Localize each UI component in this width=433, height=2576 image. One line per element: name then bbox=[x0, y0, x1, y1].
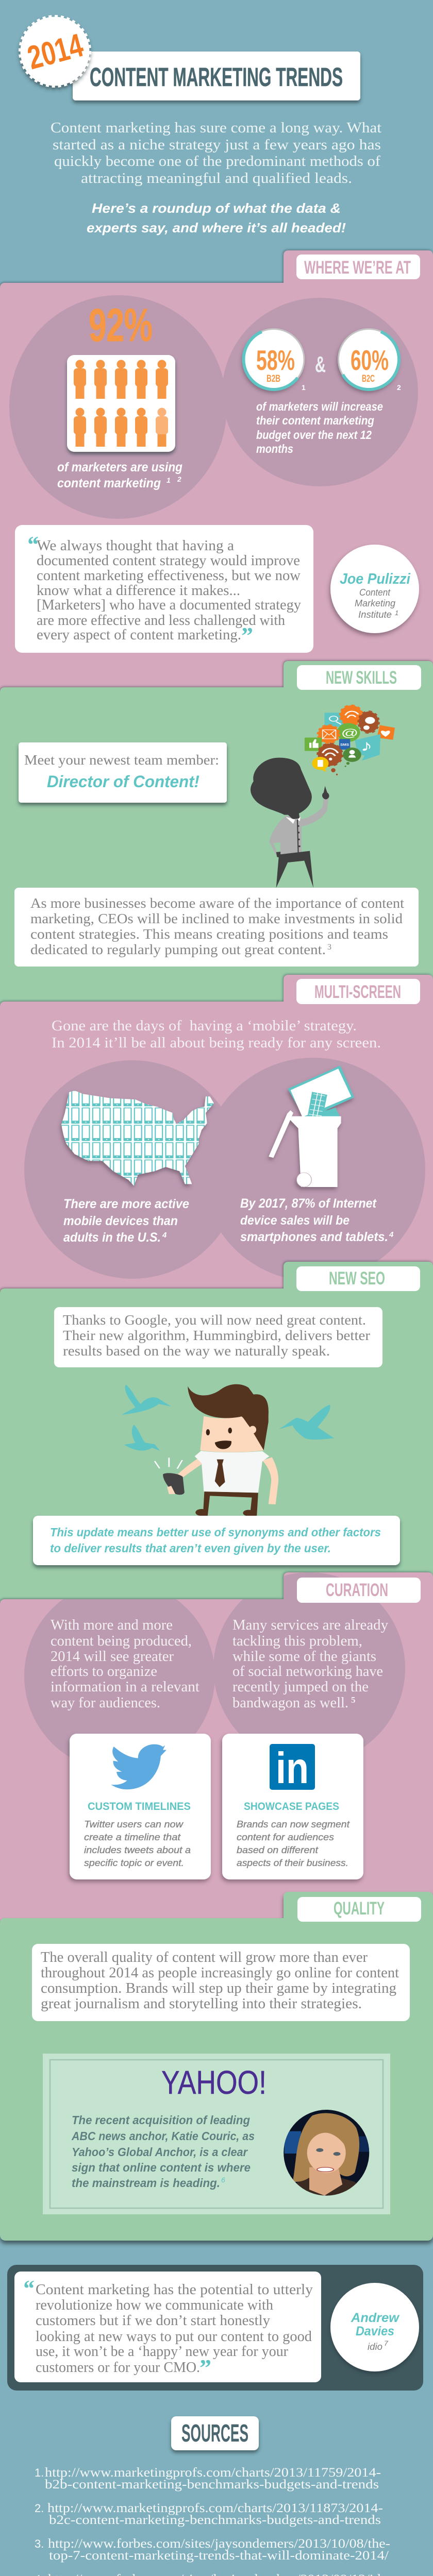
sources list: http://www.marketingprofs.com/charts/2013/11873/2014- bbox=[47, 2501, 383, 2515]
text card: quality: consumption. Brands will step up their game by integrating bbox=[41, 1980, 396, 1996]
card: director of content: Director of Content! bbox=[47, 772, 199, 791]
attribution circle: Joe Pulizzi: Marketing bbox=[355, 598, 395, 608]
quote card: Joe Pulizzi: “ bbox=[26, 531, 38, 557]
pictogram: ten people bbox=[67, 355, 175, 452]
backdrop circle: right bbox=[222, 298, 418, 486]
intro text bbox=[51, 120, 381, 187]
text card: new skills: As more businesses become aware of the importance of content bbox=[30, 895, 405, 911]
text: right column: 5 bbox=[351, 1695, 356, 1705]
stat text: device sales bbox=[240, 1196, 394, 1244]
panel: new seo bbox=[0, 1262, 433, 1602]
panel: closing quote bbox=[7, 2265, 423, 2391]
text card: quality: throughout 2014 as people increasingly go online for content bbox=[41, 1965, 399, 1981]
card: twitter custom timelines: Twitter users can now bbox=[84, 1819, 184, 1829]
illustration: devices in trash can bbox=[269, 1065, 354, 1187]
sources list: http://www.marketingprofs.com/charts/2013/11759/2014- bbox=[45, 2466, 381, 2480]
title block bbox=[20, 16, 360, 100]
intro callout bbox=[87, 200, 346, 235]
backdrop circles bbox=[24, 1572, 405, 1771]
card: linkedin showcase pages: aspects of their business. bbox=[237, 1858, 348, 1868]
quote card: Andrew Davies: use, it won’t be a ‘happy’ new year for your bbox=[36, 2344, 289, 2360]
intro text: started as a niche strategy just a few years ago has bbox=[53, 137, 381, 153]
stat caption: right: budget over the next 12 bbox=[256, 428, 372, 442]
quote card: Joe Pulizzi: content marketing effectiveness, but we now bbox=[37, 568, 301, 584]
tab label: CURATION bbox=[326, 1580, 388, 1600]
tab label bbox=[297, 665, 421, 690]
text card: new skills bbox=[14, 888, 419, 967]
quote card: Joe Pulizzi: documented content strategy would improve bbox=[37, 553, 300, 569]
sources heading: SOURCES bbox=[181, 2420, 248, 2447]
quote card: Joe Pulizzi: every aspect of content marketing. bbox=[37, 627, 241, 643]
attribution circle: Andrew Davies: Andrew bbox=[351, 2311, 400, 2325]
quote card: Joe Pulizzi: are more effective and less challenged with bbox=[37, 613, 285, 629]
tab label: NEW SEO bbox=[329, 1268, 385, 1289]
card: twitter custom timelines: includes tweets about a bbox=[84, 1845, 191, 1855]
quote card: Joe Pulizzi: We always thought that having a bbox=[37, 538, 235, 554]
yahoo text: sign that online content is where bbox=[72, 2161, 251, 2174]
ampersand: & bbox=[315, 352, 326, 377]
tab label: QUALITY bbox=[334, 1899, 385, 1919]
yahoo text: The recent acquisition of leading bbox=[72, 2113, 250, 2127]
tab label bbox=[297, 1578, 421, 1603]
text: left column bbox=[51, 1617, 199, 1711]
ring: 60% B2C bbox=[329, 319, 409, 399]
yahoo feature box bbox=[43, 2054, 390, 2214]
text: right column: recently jumped on the bbox=[232, 1679, 369, 1695]
quote card: Andrew Davies: customers but if we don’t start honestly bbox=[36, 2313, 270, 2329]
callout card: update bbox=[33, 1516, 400, 1565]
quote card: Joe Pulizzi: ” bbox=[241, 622, 253, 649]
attribution circle: Joe Pulizzi: Institute bbox=[358, 609, 392, 620]
stat: 92%: 92% bbox=[89, 300, 153, 351]
intro text: attracting meaningful and qualified leads. bbox=[81, 171, 352, 187]
text card: hummingbird: results based on the way we naturally speak. bbox=[63, 1343, 330, 1359]
sources heading bbox=[171, 2416, 259, 2450]
yahoo text: ABC news anchor, Katie Couric, as bbox=[71, 2129, 255, 2143]
stat text: device sales: smartphones and tablets. bbox=[240, 1230, 388, 1244]
icon cluster: social media: ♪ bbox=[360, 737, 373, 754]
attribution circle: Joe Pulizzi: Content bbox=[359, 587, 391, 598]
yahoo text: 6 bbox=[221, 2176, 225, 2184]
yahoo text bbox=[71, 2113, 255, 2190]
card: linkedin showcase pages: Brands can now segment bbox=[237, 1819, 350, 1829]
text card: quality: great journalism and storytelling into their strategies. bbox=[41, 1996, 362, 2012]
card: twitter custom timelines: specific topic or event. bbox=[84, 1858, 184, 1868]
stat text: device sales: By 2017, 87% of Internet bbox=[240, 1196, 377, 1211]
stat text: mobile devices bbox=[63, 1197, 189, 1245]
card: director of content bbox=[19, 742, 227, 803]
quote card: Joe Pulizzi bbox=[15, 525, 313, 653]
attribution circle: Joe Pulizzi: Joe Pulizzi bbox=[340, 571, 411, 587]
text: left column: With more and more bbox=[51, 1617, 173, 1633]
text card: hummingbird bbox=[54, 1307, 382, 1367]
yahoo text: the mainstream is heading. bbox=[72, 2176, 220, 2190]
tab label bbox=[296, 979, 420, 1004]
stat caption: right: their content marketing bbox=[256, 414, 374, 427]
ring: 60% B2C: B2C bbox=[362, 374, 375, 384]
text card: hummingbird: Thanks to Google, you will now need great content. bbox=[63, 1312, 366, 1328]
text: right column: while some of the giants bbox=[232, 1649, 376, 1665]
text: left column: efforts to organize bbox=[51, 1664, 157, 1680]
text card: hummingbird: Their new algorithm, Hummingbird, delivers better bbox=[63, 1328, 370, 1343]
panel: new skills bbox=[0, 661, 433, 1005]
intro text: In 2014 it’ll be all about being ready for any screen. bbox=[52, 1035, 381, 1051]
illustration: man with phone bbox=[155, 1384, 278, 1516]
card: twitter custom timelines bbox=[70, 1734, 211, 1879]
card: linkedin showcase pages: content for audiences bbox=[237, 1832, 334, 1842]
intro callout: Here’s a roundup of what the data & bbox=[92, 200, 341, 216]
text: right column: of social networking have bbox=[232, 1664, 383, 1680]
sources list: top-7-content-marketing-trends-that-will-dominate-2014/ bbox=[49, 2549, 389, 2563]
stat text: mobile devices: There are more active bbox=[63, 1197, 189, 1211]
icon cluster: social media: @ bbox=[341, 727, 358, 739]
sources list: http://www.forbes.com/sites/jaysondemers/2013/10/08/the- bbox=[48, 2537, 390, 2551]
title box bbox=[73, 52, 360, 100]
quote card: Andrew Davies: Content marketing has the potential to utterly bbox=[36, 2282, 313, 2298]
map: USA filled with phones bbox=[61, 1091, 214, 1186]
illustration: man pointing bbox=[251, 758, 329, 888]
portrait: Katie Couric bbox=[284, 2110, 370, 2196]
attribution circle: Andrew Davies: idio bbox=[368, 2342, 382, 2352]
sources list bbox=[34, 2466, 392, 2576]
attribution circle: Andrew Davies: 7 bbox=[384, 2339, 389, 2347]
stat text: mobile devices: 4 bbox=[162, 1231, 167, 1240]
2014 badge bbox=[20, 16, 90, 87]
callout card: update: to deliver results that aren’t even given by the user. bbox=[50, 1541, 331, 1555]
stat caption: left: content marketing bbox=[57, 476, 161, 490]
icon cluster: social media: SMS bbox=[340, 743, 349, 747]
ring: 58% B2B: 58% bbox=[256, 344, 295, 376]
text: left column: content being produced, bbox=[51, 1633, 192, 1649]
yahoo logo: YAHOO! bbox=[161, 2064, 267, 2101]
yahoo text: Yahoo’s Global Anchor, is a clear bbox=[72, 2145, 248, 2159]
icon: twitter bird bbox=[111, 1744, 166, 1789]
illustration: hummingbirds bbox=[122, 1384, 334, 1451]
card: twitter custom timelines: create a timeline that bbox=[84, 1832, 181, 1842]
tab label bbox=[296, 1266, 420, 1291]
sources list: 3. bbox=[35, 2537, 44, 2550]
sources list: b2c-content-marketing-benchmarks-budgets-and-trends bbox=[49, 2513, 381, 2527]
stat text: device sales: 4 bbox=[389, 1230, 394, 1239]
sources list: 2. bbox=[35, 2502, 44, 2515]
quote card: Joe Pulizzi: know what a difference it makes... bbox=[37, 583, 240, 599]
quote card: Andrew Davies bbox=[14, 2272, 321, 2382]
tab label bbox=[297, 1897, 421, 1922]
stat caption: left: 2 bbox=[177, 475, 181, 483]
stat text: device sales: device sales will be bbox=[240, 1213, 349, 1228]
quote card: Andrew Davies: customers or for your CMO. bbox=[36, 2360, 200, 2376]
stat caption: right: of marketers will increase bbox=[256, 400, 383, 413]
ring: 58% B2B: 1 bbox=[302, 383, 306, 392]
icon: linkedin: in bbox=[276, 1744, 309, 1793]
attribution circle: Joe Pulizzi: 1 bbox=[395, 609, 398, 617]
callout card: update: This update means better use of synonyms and other factors bbox=[50, 1526, 381, 1539]
card: linkedin showcase pages: SHOWCASE PAGES bbox=[244, 1801, 339, 1812]
panel: where we're at bbox=[0, 250, 433, 690]
text: left column: information in a relevant bbox=[51, 1679, 199, 1695]
text: left column: way for audiences. bbox=[51, 1695, 160, 1711]
panel: curation bbox=[0, 1572, 433, 1922]
text: right column bbox=[232, 1617, 388, 1711]
ring: 60% B2C: 2 bbox=[397, 383, 401, 392]
sources list: b2b-content-marketing-benchmarks-budgets-and-trends bbox=[45, 2478, 379, 2492]
ring: 60% B2C: 60% bbox=[351, 344, 389, 376]
text: right column: tackling this problem, bbox=[232, 1633, 362, 1649]
sources list: 1. bbox=[35, 2466, 44, 2479]
card: twitter custom timelines: CUSTOM TIMELINES bbox=[88, 1801, 191, 1812]
quote card: Andrew Davies: looking at new ways to put our content to good bbox=[36, 2329, 312, 2345]
backdrop circle: right bbox=[202, 1058, 425, 1281]
text: left column: 2014 will see greater bbox=[51, 1649, 174, 1665]
text card: quality: The overall quality of content will grow more than ever bbox=[41, 1950, 368, 1965]
icon cluster: social media bbox=[305, 705, 395, 775]
text card: quality bbox=[32, 1944, 410, 2021]
ring: 58% B2B: B2B bbox=[267, 374, 280, 384]
panel: quality bbox=[0, 1892, 433, 2241]
attribution circle: Andrew Davies: Davies bbox=[356, 2324, 394, 2338]
intro text: Gone are the days of having a ‘mobile’ strategy. bbox=[52, 1018, 357, 1034]
stat caption: right: months bbox=[256, 442, 293, 455]
text card: new skills: marketing, CEOs will be inclined to make investments in solid bbox=[30, 911, 403, 926]
intro text: Content marketing has sure come a long way. What bbox=[51, 120, 381, 136]
quote card: Andrew Davies: revolutionize how we communicate with bbox=[36, 2297, 273, 2313]
intro text: quickly become one of the predominant methods of bbox=[54, 154, 381, 170]
quote card: Joe Pulizzi: [Marketers] who have a documented strategy bbox=[37, 597, 301, 613]
ring: 58% B2B bbox=[231, 317, 316, 402]
attribution circle: Andrew Davies bbox=[330, 2283, 419, 2371]
text card: new skills: 3 bbox=[327, 943, 331, 952]
card: linkedin showcase pages: based on different bbox=[237, 1845, 319, 1855]
text: right column: bandwagon as well. bbox=[232, 1695, 348, 1711]
stat caption: left: of marketers are using bbox=[57, 460, 182, 474]
stat caption: left bbox=[57, 460, 182, 490]
attribution circle: Joe Pulizzi bbox=[330, 545, 419, 633]
text: right column: Many services are already bbox=[232, 1617, 388, 1633]
stat caption: left: 1 bbox=[166, 476, 171, 484]
backdrop circle: left bbox=[24, 1060, 241, 1279]
card: linkedin showcase pages bbox=[222, 1734, 363, 1879]
stat caption: right bbox=[256, 400, 383, 455]
quote card: Andrew Davies: ” bbox=[199, 2354, 211, 2381]
intro text bbox=[52, 1018, 381, 1051]
stat text: mobile devices: adults in the U.S. bbox=[63, 1230, 161, 1245]
2014 badge: 2014 bbox=[24, 26, 87, 76]
stat text: mobile devices: mobile devices than bbox=[63, 1214, 178, 1228]
quote card: Andrew Davies: “ bbox=[22, 2275, 34, 2301]
backdrop circle: left bbox=[9, 295, 227, 519]
panel: multi-screen bbox=[0, 975, 433, 1293]
card: director of content: Meet your newest team member: bbox=[24, 752, 219, 768]
text card: new skills: dedicated to regularly pumping out great content. bbox=[30, 942, 326, 957]
intro callout: experts say, and where it’s all headed! bbox=[87, 220, 346, 235]
text card: new skills: content strategies. This means creating positions and teams bbox=[30, 926, 388, 942]
